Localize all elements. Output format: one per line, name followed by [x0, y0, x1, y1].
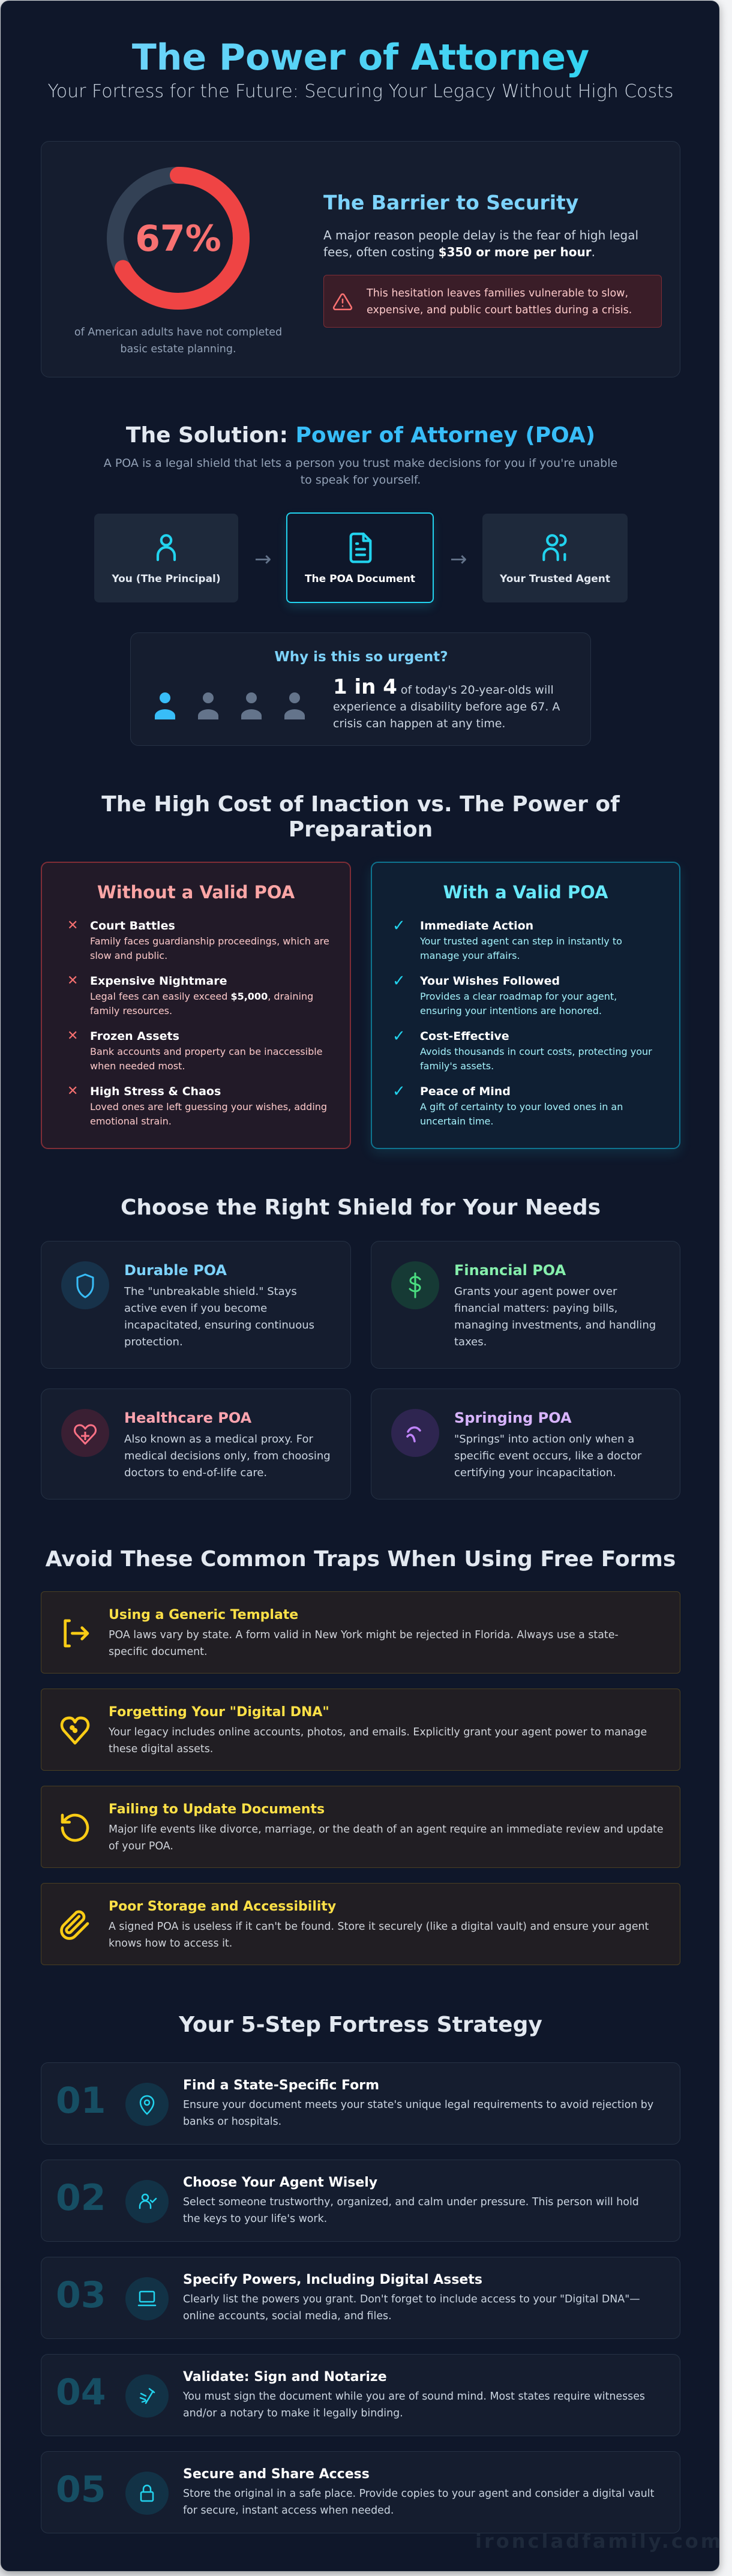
trap: update documents: Failing to Update Documents	[109, 1802, 325, 1817]
callout: warning	[323, 275, 662, 328]
arrow: →	[254, 547, 271, 571]
trap: update documents	[41, 1786, 680, 1868]
step 01	[41, 2062, 680, 2145]
trap: generic template: Using a Generic Template	[109, 1608, 298, 1623]
heading: the solution: The Solution: Power of Attorney (POA)	[126, 423, 595, 448]
list: negatives: Court Battles	[90, 919, 175, 932]
subtitle: Your Fortress for the Future: Securing Your Legacy Without High Costs	[47, 81, 674, 102]
icon: springing arcs	[391, 1409, 439, 1457]
arrow: →	[450, 547, 467, 571]
list: negatives: Expensive Nightmare	[90, 974, 227, 988]
list: negatives: High Stress & Chaos	[90, 1085, 221, 1098]
list: positives: ✓	[392, 972, 406, 990]
list: positives: ✓	[392, 1082, 406, 1100]
step 05: 05	[56, 2469, 106, 2511]
list: negatives: ✕	[67, 918, 78, 933]
icon: 1 in 4 people	[155, 692, 305, 719]
flow: principal	[94, 514, 238, 602]
donut caption: of American adults have not completed basic estate planning.	[74, 326, 282, 355]
step 04: 04	[56, 2371, 106, 2413]
icon: paperclip	[60, 1911, 89, 1940]
list: negatives: Legal fees can easily exceed $5,000, draining family resources.	[90, 991, 313, 1016]
step 02: 02	[56, 2177, 106, 2219]
flow: POA document: The POA Document	[305, 573, 415, 585]
donut chart 67%: 67%	[135, 218, 221, 260]
icon: laptop	[125, 2277, 169, 2320]
list: negatives: Family faces guardianship proceedings, which are slow and public.	[90, 935, 329, 961]
list: positives: A gift of certainty to your loved ones in an uncertain time.	[420, 1101, 623, 1127]
step 02	[41, 2160, 680, 2242]
icon: signature	[125, 2374, 169, 2418]
stat text: 1 in 4 of today's 20-year-olds will experience a disability before age 67. A crisis can happen at any time.	[333, 675, 560, 730]
panel: with POA: With a Valid POA	[443, 882, 608, 902]
icon: warning triangle	[332, 293, 353, 310]
list: positives: Your trusted agent can step in instantly to manage your affairs.	[420, 935, 622, 961]
heading: choose shield: Choose the Right Shield for Your Needs	[121, 1195, 601, 1220]
trap: storage	[41, 1883, 680, 1965]
panel: durable POA: Durable POA	[124, 1262, 227, 1279]
heading: 5-step strategy: Your 5-Step Fortress Strategy	[179, 2013, 542, 2037]
panel: without POA	[41, 862, 351, 1149]
step 05: Store the original in a safe place. Provide copies to your agent and consider a digital vault for secure, instant access when needed.	[183, 2488, 654, 2517]
panel: springing POA	[371, 1389, 680, 1500]
list: positives: Peace of Mind	[420, 1085, 511, 1098]
icon: rotate	[61, 1813, 89, 1842]
step 03: 03	[56, 2274, 106, 2316]
panel: with POA	[371, 862, 680, 1149]
list: positives: Provides a clear roadmap for your agent, ensuring your intentions are honored.	[420, 991, 617, 1016]
step 01: Find a State-Specific Form	[183, 2078, 379, 2093]
flow: POA document	[286, 512, 434, 603]
trap: generic template	[41, 1591, 680, 1674]
text: solution description: A POA is a legal shield that lets a person you trust make decisions for you if you're unable to speak for yourself.	[104, 457, 617, 487]
icon: heart	[61, 1409, 109, 1457]
list: negatives	[67, 918, 329, 1127]
panel: springing POA: Springing POA	[454, 1410, 572, 1426]
title: The Power of Attorney	[132, 37, 589, 79]
trap: generic template: POA laws vary by state. A form valid in New York might be rejected in Florida. Always use a state-specific document.	[109, 1629, 619, 1658]
text block: fees: A major reason people delay is the fear of high legal fees, often costing $350 or more per hour.	[323, 228, 638, 259]
list: positives: Immediate Action	[420, 919, 533, 932]
step 03	[41, 2257, 680, 2339]
step 01: Ensure your document meets your state's unique legal requirements to avoid rejection by banks or hospitals.	[183, 2099, 653, 2128]
icon: user	[156, 534, 176, 562]
list: positives	[392, 917, 652, 1127]
icon: heart	[60, 1716, 90, 1745]
list: negatives: Loved ones are left guessing your wishes, adding emotional strain.	[90, 1101, 327, 1127]
trap: storage: Poor Storage and Accessibility	[109, 1899, 336, 1914]
icon: exit arrow	[64, 1619, 89, 1648]
step 04: Validate: Sign and Notarize	[183, 2370, 387, 2385]
trap: update documents: Major life events like divorce, marriage, or the death of an agent require an immediate review and update of your POA.	[109, 1824, 664, 1852]
list: positives: ✓	[392, 917, 406, 935]
list: positives: Cost-Effective	[420, 1030, 509, 1043]
flow: principal: You (The Principal)	[112, 573, 221, 585]
icon: users	[542, 534, 567, 562]
step 02: Choose Your Agent Wisely	[183, 2175, 377, 2190]
panel: healthcare POA: Healthcare POA	[124, 1410, 251, 1426]
panel: barrier to security	[41, 141, 680, 377]
list: positives: ✓	[392, 1027, 406, 1045]
panel: durable POA	[41, 1241, 351, 1369]
icon: document	[349, 533, 372, 563]
panel: healthcare POA	[41, 1389, 351, 1500]
panel: without POA: Without a Valid POA	[97, 882, 295, 902]
heading: cost of inaction: The High Cost of Inaction vs. The Power of Preparation	[101, 792, 620, 842]
list: negatives: ✕	[67, 973, 78, 988]
flow: trusted agent: Your Trusted Agent	[500, 573, 610, 585]
list: negatives: Frozen Assets	[90, 1030, 179, 1043]
icon: dollar	[391, 1261, 439, 1309]
list: negatives: ✕	[67, 1028, 78, 1043]
panel: healthcare POA: Also known as a medical proxy. For medical decisions only, from choosing doctors to end-of-life care.	[124, 1433, 331, 1479]
heading: traps: Avoid These Common Traps When Using Free Forms	[46, 1547, 676, 1572]
flow: trusted agent	[482, 514, 628, 602]
step 04	[41, 2354, 680, 2436]
trap: digital DNA: Your legacy includes online accounts, photos, and emails. Explicitly grant your agent power to manage these digital assets.	[109, 1726, 647, 1755]
icon: shield	[61, 1261, 109, 1309]
list: negatives: ✕	[67, 1084, 78, 1099]
heading: urgent: Why is this so urgent?	[274, 649, 448, 665]
icon: lock	[125, 2472, 169, 2515]
list: positives: Your Wishes Followed	[420, 974, 560, 988]
trap: storage: A signed POA is useless if it can't be found. Store it securely (like a digital vault) and ensure your agent knows how to access it.	[109, 1921, 649, 1950]
panel: urgency	[130, 632, 591, 746]
step 01: 01	[56, 2080, 106, 2122]
step 02: Select someone trustworthy, organized, and calm under pressure. This person will hold the keys to your life's work.	[183, 2196, 639, 2225]
icon: map pin	[125, 2083, 169, 2126]
step 03: Clearly list the powers you grant. Don't forget to include access to your "Digital DNA"—online accounts, social media, and files.	[183, 2293, 640, 2322]
list: negatives: Bank accounts and property can be inaccessible when needed most.	[90, 1046, 323, 1072]
panel: financial POA	[371, 1241, 680, 1369]
title	[1, 35, 720, 80]
panel: financial POA: Grants your agent power over financial matters: paying bills, managing investments, and handling taxes.	[454, 1285, 656, 1348]
step 04: You must sign the document while you are of sound mind. Most states require witnesses and/or a notary to make it legally binding.	[183, 2391, 645, 2419]
step 05: Secure and Share Access	[183, 2467, 370, 2482]
step 03: Specify Powers, Including Digital Assets	[183, 2272, 482, 2287]
trap: digital DNA	[41, 1689, 680, 1771]
panel: springing POA: "Springs" into action only when a specific event occurs, like a doctor certifying your incapacitation.	[454, 1433, 641, 1479]
watermark: ironcladfamily.com	[475, 2530, 723, 2553]
icon: user check	[125, 2180, 169, 2223]
step 05	[41, 2451, 680, 2533]
trap: digital DNA: Forgetting Your "Digital DNA"	[109, 1705, 329, 1720]
panel: financial POA: Financial POA	[454, 1262, 566, 1279]
panel: durable POA: The "unbreakable shield." Stays active even if you become incapacitated, ensuring continuous protection.	[124, 1285, 314, 1348]
callout: warning: This hesitation leaves families vulnerable to slow, expensive, and public court battles during a crisis.	[367, 287, 632, 316]
list: positives: Avoids thousands in court costs, protecting your family's assets.	[420, 1046, 652, 1072]
donut chart 67%	[107, 167, 250, 310]
heading: barrier: The Barrier to Security	[323, 191, 578, 214]
